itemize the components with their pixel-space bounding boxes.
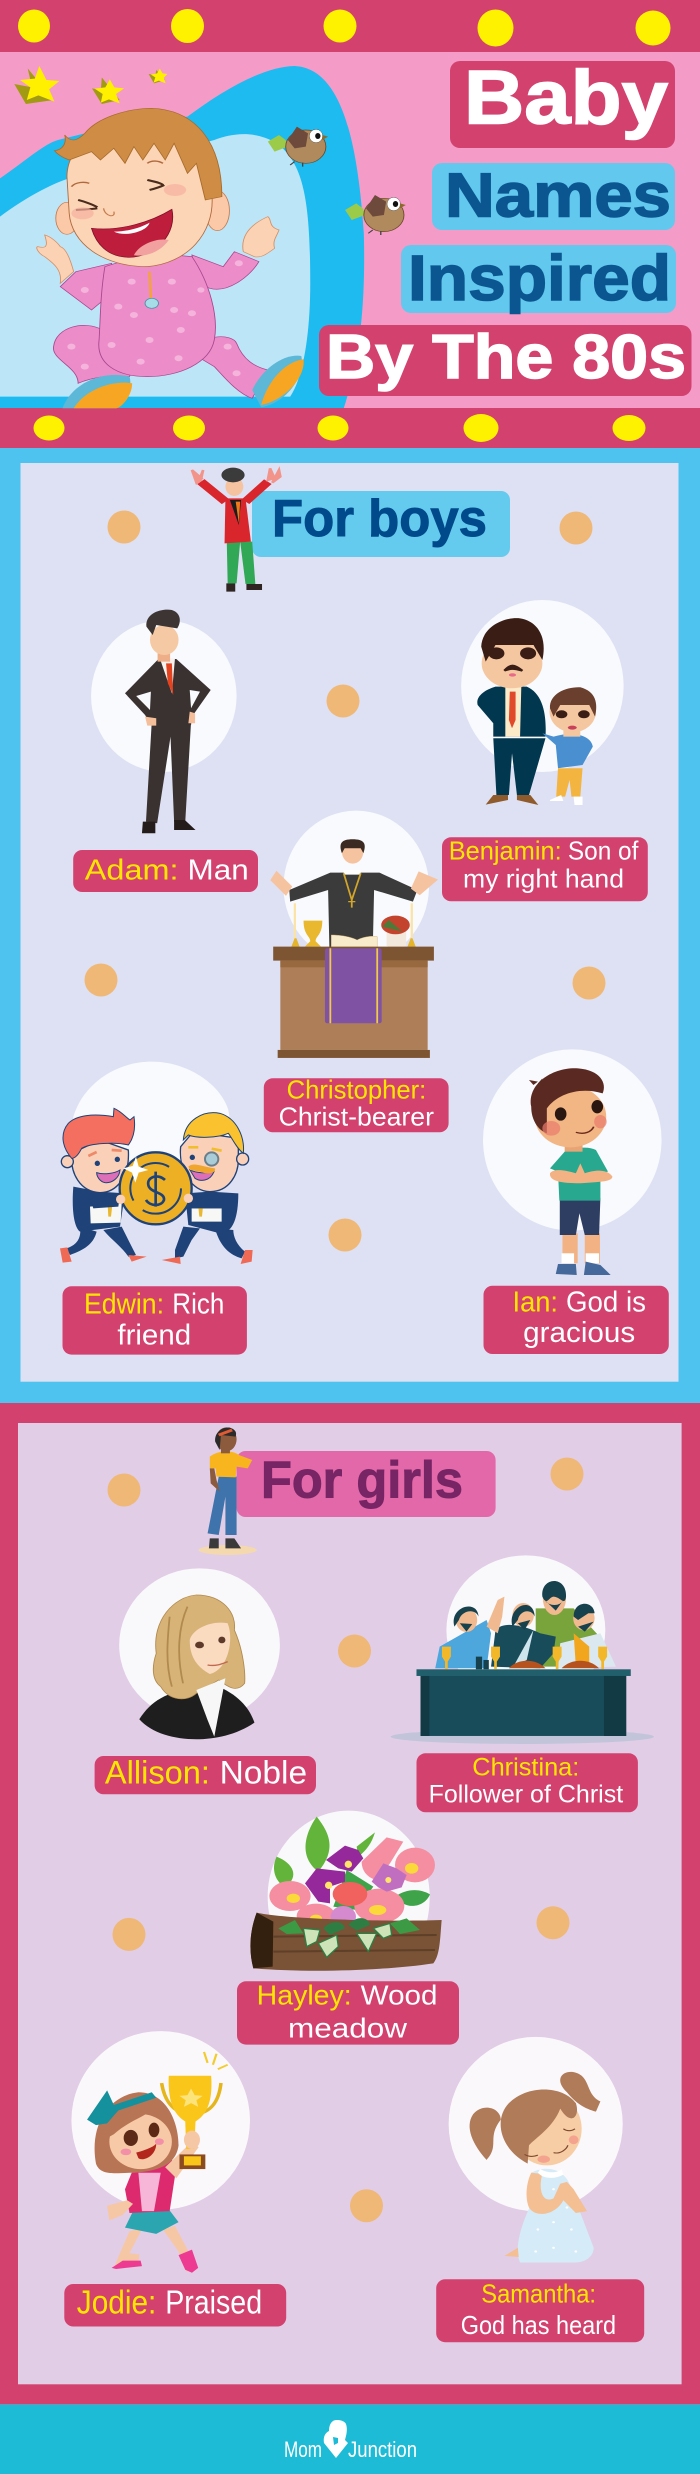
illustration: Samantha [449,2037,623,2262]
label: Christina: Follower of Christ [429,1781,623,1809]
label: Ian: God is [566,1287,646,1319]
label: Ian: gracious [523,1317,635,1349]
label: Hayley: meadow [288,2012,408,2043]
label: Ian [484,1286,669,1354]
label: Jodie [64,2284,286,2326]
label: Adam [73,850,258,892]
label: Benjamin [442,835,648,901]
illustration: Ian [483,1049,662,1275]
header light arch [0,134,310,397]
label: Christopher [264,1074,449,1132]
title: Names [445,162,671,231]
title: Inspired [408,242,671,314]
label: Edwin [62,1286,247,1355]
label: Samantha: Samantha: [481,2279,596,2309]
label: Christina [416,1753,638,1812]
label: Edwin: Rich [172,1288,224,1320]
panel: for girls [0,1403,700,2404]
illustration: cheering man [192,468,280,592]
label: Adam: Adam: [85,854,178,886]
label: Hayley: Hayley: [257,1980,352,2011]
illustration: Christina [391,1555,654,1744]
header background [0,52,700,408]
label: Christopher: Christ-bearer [279,1102,434,1132]
illustration: Edwin [60,1062,253,1264]
panel: for boys [0,448,700,1403]
label: Benjamin: Benjamin: [449,835,562,865]
illustration: waving woman [199,1427,257,1555]
icon: stars [14,66,167,104]
label: Adam: Man [188,854,249,886]
footer [0,2404,700,2474]
icon: birds [268,127,406,235]
label: Benjamin: Son of [568,835,639,865]
label: Samantha [436,2279,644,2342]
title: By The 80s [326,323,686,392]
logo: MomJunction: Mom [284,2437,322,2462]
illustration: Hayley flowers on log [250,1811,442,1971]
label: Christopher: Christopher: [287,1074,426,1104]
title [319,55,692,396]
label: Allison: Allison: [105,1754,210,1790]
heading: for boys: For boys [272,490,487,548]
bottom header band with yellow dots [0,408,700,448]
logo: MomJunction: Junction [348,2437,417,2462]
illustration: Allison [119,1568,280,1739]
header blue arch [0,66,364,408]
label: Edwin: friend [117,1319,191,1351]
illustration: Jodie [71,2031,250,2273]
label: Jodie: Jodie: [77,2284,156,2321]
label: Samantha: God has heard [461,2310,616,2340]
illustration: Benjamin [461,600,624,805]
illustration: Christopher [272,811,435,1058]
heading: for girls: For girls [261,1452,463,1510]
label: Christina: Christina: [472,1754,579,1782]
label: Allison [95,1754,316,1794]
label: Benjamin: my right hand [463,863,624,893]
label: Hayley: Wood [361,1980,438,2011]
label: Ian: Ian: [512,1287,558,1319]
title: Baby [464,55,668,140]
label: Hayley [237,1980,459,2045]
logo: MomJunction [284,2420,417,2462]
label: Allison: Noble [220,1754,307,1790]
top band with yellow dots [0,0,700,52]
label: Edwin: Edwin: [84,1288,164,1320]
label: Jodie: Praised [165,2284,262,2321]
illustration: laughing baby [37,108,304,408]
illustration: Adam [91,610,237,833]
